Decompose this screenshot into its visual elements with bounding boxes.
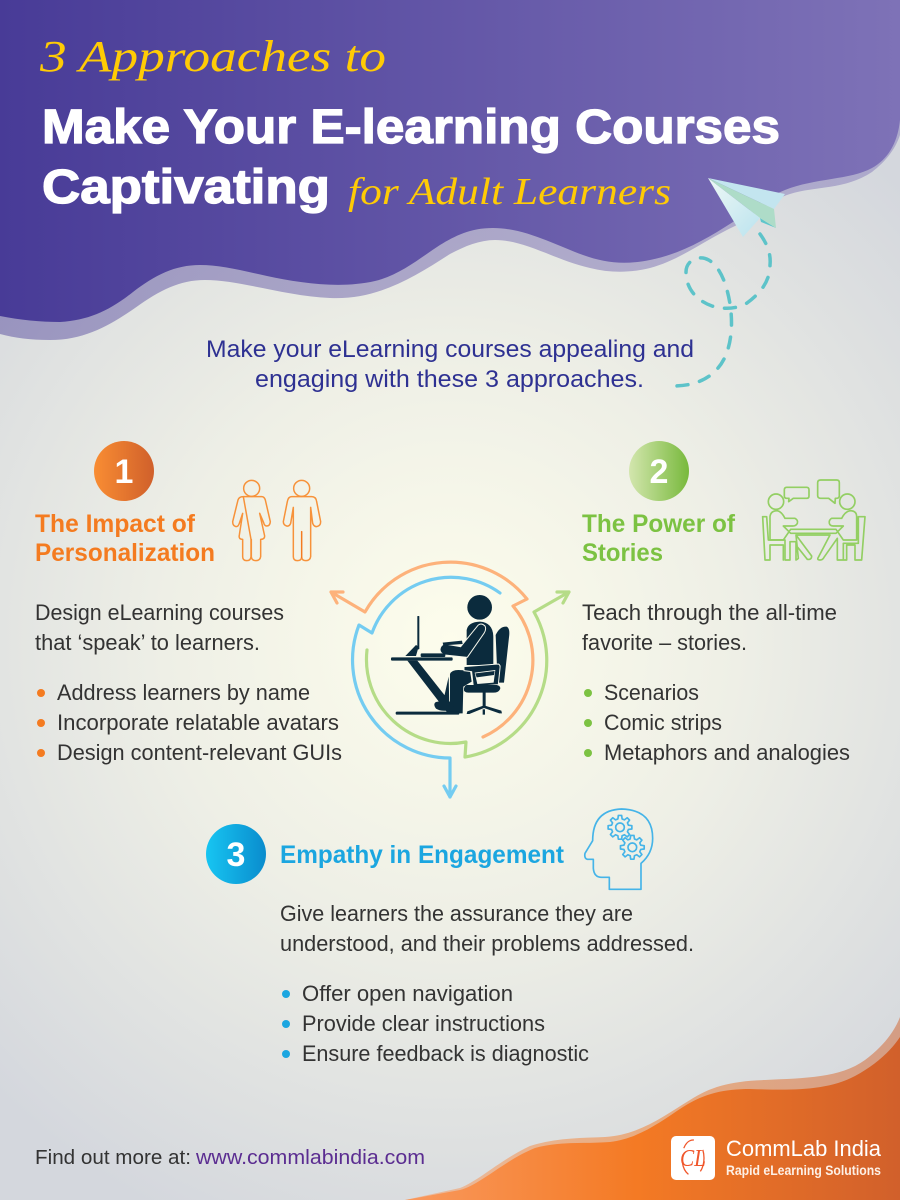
bullet list	[584, 680, 850, 765]
icon: head with gears	[585, 809, 653, 889]
title: Make Your E-learning Courses	[42, 101, 780, 154]
badge 1: 1	[115, 453, 133, 491]
center graphic: three cycle arrows	[331, 562, 569, 797]
bullet list: Incorporate relatable avatars	[57, 710, 339, 735]
description: Design eLearning courses	[35, 600, 284, 625]
panel: stories	[582, 441, 865, 765]
heading: stories: The Power of	[582, 510, 736, 538]
intro text	[206, 336, 694, 393]
footer link text: www.commlabindia.com	[195, 1147, 425, 1169]
logo text: CommLab India	[726, 1136, 882, 1161]
footer wave band	[405, 1017, 900, 1200]
heading: empathy: Empathy in Engagement	[280, 841, 565, 869]
description	[280, 901, 694, 956]
logo	[671, 1136, 882, 1180]
icon: two people talking at table	[763, 480, 865, 560]
bullet list: Ensure feedback is diagnostic	[302, 1041, 589, 1066]
bullet list: Comic strips	[604, 710, 722, 735]
badge 2	[629, 441, 689, 501]
heading: stories: Stories	[582, 539, 663, 567]
badge 3	[206, 824, 266, 884]
intro text: Make your eLearning courses appealing and	[206, 336, 694, 363]
description	[35, 600, 284, 655]
title: for Adult Learners	[348, 171, 671, 213]
badge 3: 3	[227, 836, 245, 874]
bullet list: Offer open navigation	[302, 981, 513, 1006]
footer link text: Find out more at:	[35, 1147, 191, 1169]
heading: personalization	[35, 510, 215, 567]
bullet list: Scenarios	[604, 680, 699, 705]
intro text: engaging with these 3 approaches.	[255, 366, 644, 393]
badge 1	[94, 441, 154, 501]
description: Teach through the all-time	[582, 600, 837, 625]
panel: empathy	[206, 809, 694, 1066]
icon: dashed flight path	[673, 234, 770, 386]
description: Give learners the assurance they are	[280, 901, 633, 926]
arrow: orange	[331, 562, 533, 737]
panel: personalization	[35, 441, 342, 765]
footer wave	[405, 1037, 900, 1200]
heading: personalization: The Impact of	[35, 510, 196, 538]
logo mark: CL	[680, 1146, 706, 1172]
header wave band	[0, 100, 900, 340]
logo: Rapid eLearning Solutions	[726, 1162, 881, 1178]
heading: stories	[582, 510, 736, 567]
bullet list	[282, 981, 589, 1066]
title: 3 Approaches to	[39, 32, 386, 81]
description: that ‘speak’ to learners.	[35, 630, 260, 655]
description	[582, 600, 837, 655]
arrow: green	[366, 592, 569, 757]
description: favorite – stories.	[582, 630, 747, 655]
icon: paper airplane	[708, 178, 785, 237]
title	[39, 32, 780, 214]
description: understood, and their problems addressed.	[280, 931, 694, 956]
icon: person at desk	[391, 595, 509, 715]
header wave	[0, 0, 900, 322]
heading: personalization: Personalization	[35, 539, 215, 567]
badge 2: 2	[650, 453, 668, 491]
bullet list: Provide clear instructions	[302, 1011, 545, 1036]
icon: two people	[233, 480, 321, 561]
bullet list: Design content-relevant GUIs	[57, 740, 342, 765]
bullet list: Address learners by name	[57, 680, 310, 705]
title: Captivating	[42, 161, 330, 214]
arrow: blue	[353, 577, 500, 797]
bullet list: Metaphors and analogies	[604, 740, 850, 765]
bullet list	[37, 680, 342, 765]
logo mark	[671, 1136, 715, 1180]
